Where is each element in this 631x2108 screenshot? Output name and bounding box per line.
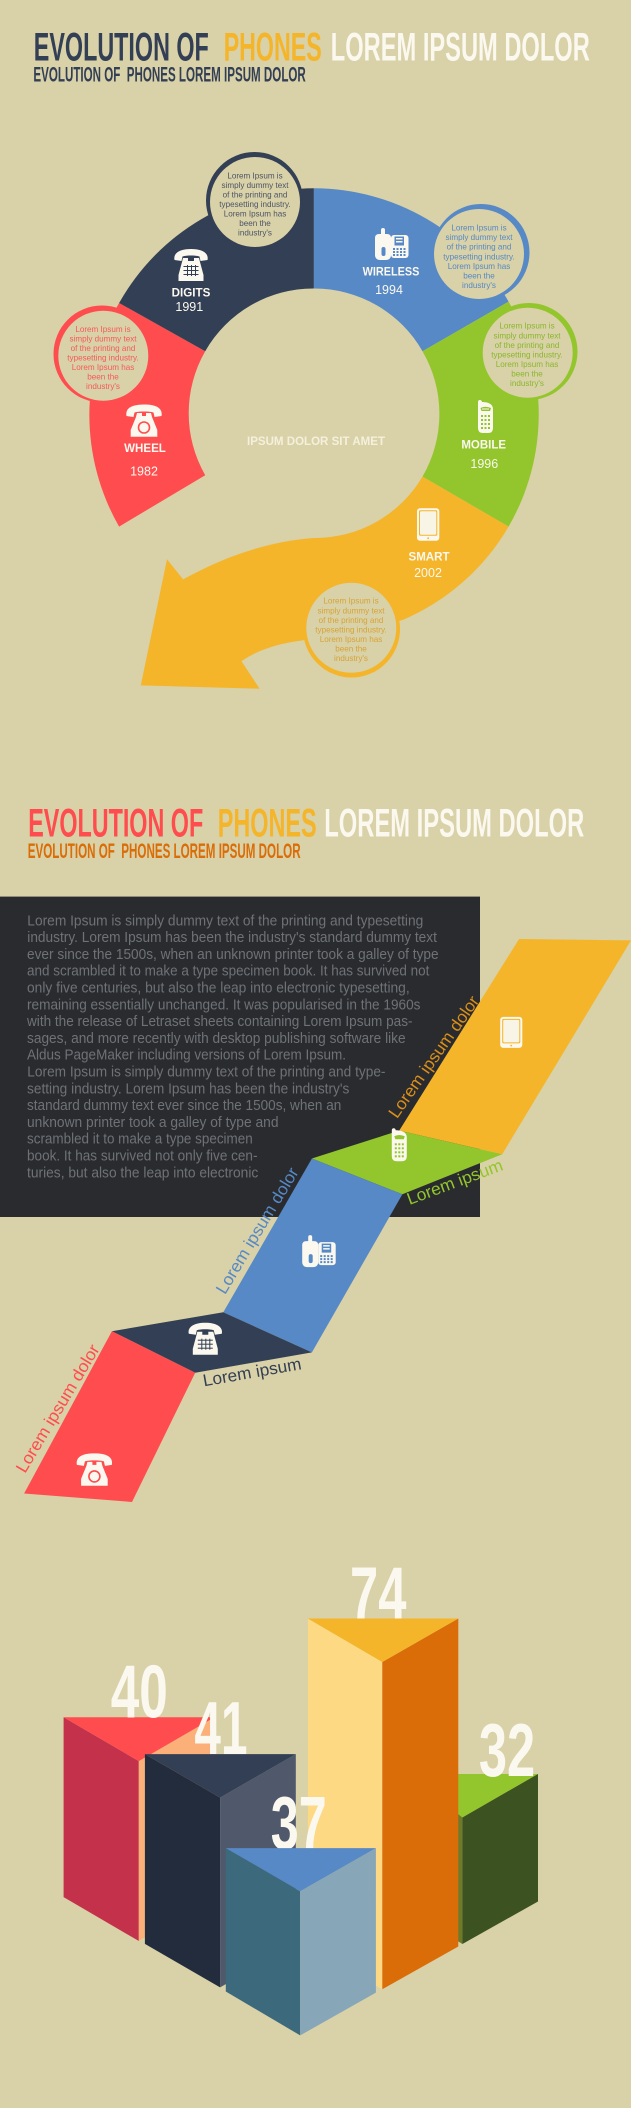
label: mobile: MOBILE xyxy=(461,438,506,452)
bar: blue 37 xyxy=(226,1848,376,2035)
paragraph text: with the release of Letraset sheets containing Lorem Ipsum pas- xyxy=(26,1014,413,1030)
paragraph text: sages, and more recently with desktop publishing software like xyxy=(27,1031,406,1047)
paragraph text: Aldus PageMaker including versions of Lorem Ipsum. xyxy=(27,1048,346,1064)
bubble: wheel: Lorem Ipsum has xyxy=(72,363,134,372)
segment: wireless xyxy=(314,188,509,351)
paragraph text: standard dummy text ever since the 1500s, when an xyxy=(27,1098,341,1114)
bubble: smart: Lorem Ipsum is xyxy=(323,597,379,606)
bar: red 40 xyxy=(64,1717,214,1941)
icon: push-button phone xyxy=(174,249,208,281)
year: 2002: 2002 xyxy=(414,566,442,580)
paragraph text: remaining essentially unchanged. It was popularised in the 1960s xyxy=(27,997,420,1013)
bubble: digits: Lorem Ipsum is xyxy=(227,171,283,180)
bar value: 41: 41 xyxy=(194,1686,248,1770)
bubble: wheel: industry's xyxy=(86,382,120,391)
label: smart: SMART xyxy=(408,550,450,564)
title: EVOLUTION OF xyxy=(28,802,203,846)
bubble: wheel xyxy=(54,306,150,402)
bar: green 32 xyxy=(387,1774,538,1944)
step: mobile xyxy=(312,1131,502,1194)
bubble: wheel: Lorem Ipsum is xyxy=(75,325,131,334)
paragraph text: industry. Lorem Ipsum has been the industry's standard dummy text xyxy=(27,930,437,946)
icon: rotary phone xyxy=(126,404,162,437)
bubble: smart: of the printing and xyxy=(319,616,383,625)
label: red step: Lorem ipsum dolor xyxy=(12,1341,104,1476)
bubble: digits: Lorem Ipsum has xyxy=(224,210,286,219)
bubble: digits: industry's xyxy=(238,229,272,238)
bubble: smart: Lorem Ipsum has xyxy=(320,635,382,644)
bubble: wireless: been the xyxy=(463,271,495,280)
bubble: wireless: of the printing and xyxy=(447,243,511,252)
bubble: wireless: simply dummy text xyxy=(445,233,513,242)
paragraph text: and scrambled it to make a type specimen book. It has survived not xyxy=(27,964,429,980)
bubble: digits: typesetting industry. xyxy=(219,200,291,209)
segment: mobile xyxy=(422,302,539,527)
paragraph text: book. It has survived not only five cen- xyxy=(27,1148,258,1164)
bubble: smart: been the xyxy=(335,644,367,653)
icon: push-button phone xyxy=(189,1323,222,1355)
label: blue step: Lorem ipsum dolor xyxy=(212,1164,303,1297)
bar: navy 41 xyxy=(145,1754,296,1987)
icon: mobile phone xyxy=(478,400,493,433)
bubble: digits: been the xyxy=(239,219,271,228)
step: wireless xyxy=(223,1158,402,1352)
bubble: wheel: simply dummy text xyxy=(69,334,137,343)
subtitle: EVOLUTION OF PHONES LOREM IPSUM DOLOR xyxy=(28,840,301,863)
bubble: mobile: industry's xyxy=(510,379,544,388)
bubble: wireless: Lorem Ipsum has xyxy=(448,262,510,271)
chart: 3D bars xyxy=(64,1552,538,2035)
bubble: digits xyxy=(206,152,303,249)
paragraph text xyxy=(26,913,439,1181)
bubble: smart xyxy=(303,580,400,678)
label: green step: Lorem ipsum xyxy=(404,1156,506,1209)
step: digits xyxy=(112,1312,312,1373)
center label: IPSUM DOLOR SIT AMET xyxy=(247,436,385,448)
bubble: smart: simply dummy text xyxy=(317,606,385,615)
bubble: smart: typesetting industry. xyxy=(315,625,387,634)
paragraph text: turies, but also the leap into electronic xyxy=(27,1165,258,1181)
bubble: wireless: typesetting industry. xyxy=(443,252,515,261)
icon: tablet xyxy=(500,1017,522,1048)
bubble: digits: of the printing and xyxy=(223,190,287,200)
bubble: wireless: industry's xyxy=(462,281,496,290)
bubble: mobile: simply dummy text xyxy=(493,331,561,340)
section: staircase xyxy=(0,802,631,1502)
segment: wheel xyxy=(89,303,205,527)
bubble: mobile xyxy=(480,303,578,400)
bubble: digits: simply dummy text xyxy=(221,181,289,190)
bubble: wireless: Lorem Ipsum is xyxy=(451,224,507,233)
paragraph text: scrambled it to make a type specimen xyxy=(27,1132,253,1148)
bar value: 32: 32 xyxy=(479,1708,535,1792)
title: PHONES xyxy=(218,802,317,846)
bubble: wheel: of the printing and xyxy=(71,344,135,353)
title: EVOLUTION OF xyxy=(34,26,209,70)
icon: mobile phone xyxy=(392,1128,407,1161)
bubble: mobile: Lorem Ipsum is xyxy=(499,322,555,331)
label: wheel: WHEEL xyxy=(124,441,166,455)
segment: smart arrow xyxy=(141,477,509,689)
paragraph text: only five centuries, but also the leap into electronic typesetting, xyxy=(27,980,410,996)
paragraph text: Lorem Ipsum is simply dummy text of the printing and type- xyxy=(27,1064,386,1080)
bubble: mobile: typesetting industry. xyxy=(491,350,563,359)
icon: rotary phone xyxy=(77,1453,112,1486)
icon: tablet xyxy=(417,508,439,541)
bar value: 37: 37 xyxy=(271,1781,327,1865)
panel: dark text box xyxy=(0,897,480,1217)
step: wheel xyxy=(24,1331,195,1502)
bubble: mobile: Lorem Ipsum has xyxy=(496,360,558,369)
icon: wireless phone xyxy=(302,1235,336,1267)
label: wireless: WIRELESS xyxy=(363,264,419,278)
bar value: 74: 74 xyxy=(350,1552,407,1636)
bubble: mobile: of the printing and xyxy=(495,341,559,350)
paragraph text: unknown printer took a galley of type and xyxy=(27,1115,279,1131)
bubble: wireless xyxy=(432,204,530,301)
bar: yellow 74 xyxy=(308,1618,458,1989)
bubble: wheel: been the xyxy=(87,373,119,382)
paragraph text: Lorem Ipsum is simply dummy text of the printing and typesetting xyxy=(27,913,423,929)
label: yellow step: Lorem ipsum dolor xyxy=(385,992,483,1122)
title: PHONES xyxy=(224,26,322,70)
year: 1991: 1991 xyxy=(175,300,203,314)
label: digits: DIGITS xyxy=(172,285,210,299)
subtitle: EVOLUTION OF PHONES LOREM IPSUM DOLOR xyxy=(33,64,306,87)
year: 1982: 1982 xyxy=(130,464,158,478)
segment: digits xyxy=(119,188,314,351)
label: navy step: Lorem ipsum xyxy=(201,1354,303,1390)
section: ring diagram xyxy=(33,26,590,689)
bubble: wheel: typesetting industry. xyxy=(67,354,139,363)
bubble: mobile: been the xyxy=(511,369,543,378)
bubble: smart: industry's xyxy=(334,654,368,663)
paragraph text: setting industry. Lorem Ipsum has been the industry's xyxy=(27,1081,349,1097)
year: 1996: 1996 xyxy=(470,457,498,471)
icon: wireless phone xyxy=(375,228,408,260)
bar value: 40: 40 xyxy=(111,1650,168,1734)
year: 1994: 1994 xyxy=(375,283,403,297)
paragraph text: ever since the 1500s, when an unknown printer took a galley of type xyxy=(27,947,439,963)
step: smart xyxy=(399,939,631,1154)
